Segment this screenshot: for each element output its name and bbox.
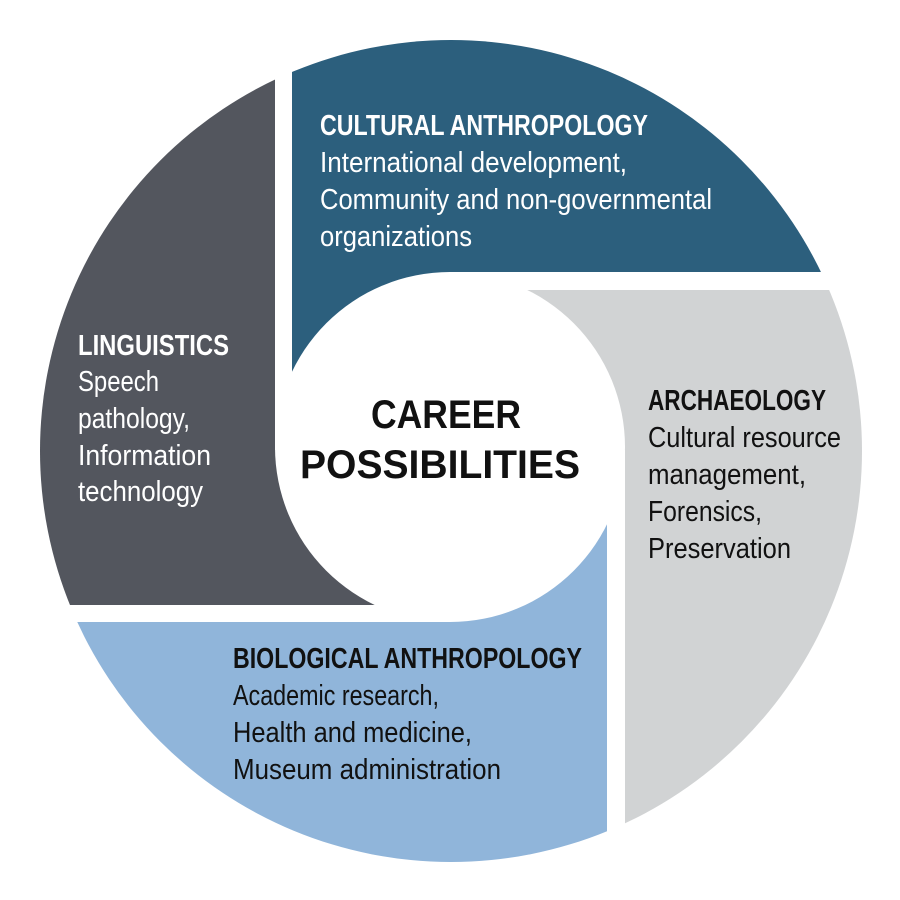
text: archaeology: Preservation: [648, 533, 791, 565]
text: biological anthropology: Museum administration: [233, 754, 501, 786]
text: linguistics: LINGUISTICS: [78, 330, 229, 362]
center title: CAREER: [371, 393, 521, 437]
center circle: [275, 272, 625, 622]
text: archaeology: Forensics,: [648, 496, 762, 528]
center title: POSSIBILITIES: [300, 443, 580, 487]
text: archaeology: [648, 385, 841, 565]
text: linguistics: pathology,: [78, 403, 190, 435]
text: cultural anthropology: CULTURAL ANTHROPOLOGY: [320, 110, 648, 142]
text: linguistics: Speech: [78, 366, 159, 398]
text: archaeology: management,: [648, 459, 806, 491]
text: archaeology: ARCHAEOLOGY: [648, 385, 826, 417]
text: biological anthropology: Health and medicine,: [233, 717, 472, 749]
text: biological anthropology: [233, 643, 582, 786]
text: cultural anthropology: organizations: [320, 221, 472, 253]
text: cultural anthropology: International development,: [320, 147, 627, 179]
panel: biological anthropology: [77, 524, 607, 862]
text: cultural anthropology: [320, 110, 712, 253]
panel: cultural anthropology: [292, 40, 821, 372]
text: archaeology: Cultural resource: [648, 422, 841, 454]
panel: linguistics: [40, 80, 374, 605]
text: linguistics: Information: [78, 440, 211, 472]
text: linguistics: [78, 330, 229, 508]
text: cultural anthropology: Community and non-governmental: [320, 184, 712, 216]
text: biological anthropology: Academic research,: [233, 680, 439, 712]
panel: archaeology: [528, 290, 862, 824]
text: biological anthropology: BIOLOGICAL ANTHROPOLOGY: [233, 643, 582, 675]
center title: [300, 393, 580, 487]
text: linguistics: technology: [78, 476, 203, 508]
